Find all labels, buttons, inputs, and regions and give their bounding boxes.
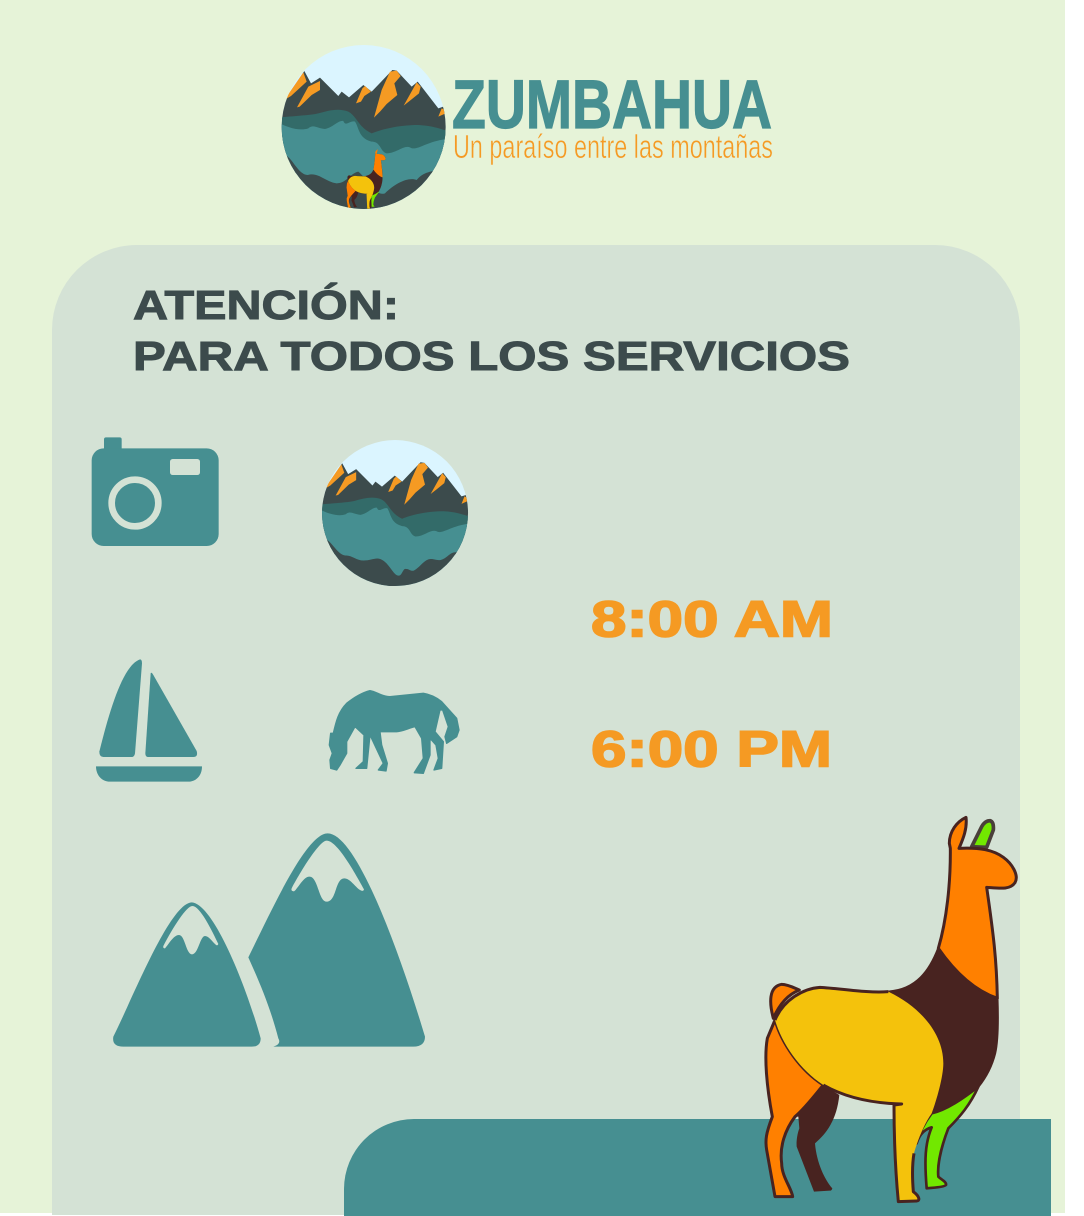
logo tagline: Un paraíso entre las montañas — [453, 128, 773, 165]
ground band — [344, 1119, 1051, 1216]
hindquarter — [766, 1020, 823, 1197]
tail — [771, 984, 799, 1018]
icon: sailboat — [96, 659, 202, 782]
front far leg — [917, 1087, 978, 1188]
icon: landscape emblem — [322, 440, 468, 586]
heading: ATENCIÓN: — [133, 282, 399, 328]
logo wordmark: ZUMBAHUA — [452, 66, 772, 143]
neck and head — [938, 817, 1016, 998]
heading: PARA TODOS LOS SERVICIOS — [133, 333, 850, 379]
body outline — [775, 987, 919, 1202]
icon: mountains — [113, 833, 425, 1047]
mini llama — [347, 149, 386, 209]
chest — [888, 948, 998, 1113]
heading — [133, 282, 850, 379]
closing time: 6:00 PM — [591, 720, 832, 778]
rear far leg — [795, 1085, 839, 1192]
llama — [766, 817, 1016, 1202]
icon: camera — [92, 437, 219, 546]
logo — [275, 40, 773, 217]
logo emblem — [282, 45, 446, 209]
main panel — [52, 245, 1020, 1215]
far ear — [972, 821, 993, 847]
icon: grazing horse — [329, 691, 459, 773]
yellow saddle body and front leg — [775, 987, 943, 1202]
opening time: 8:00 AM — [591, 590, 833, 648]
